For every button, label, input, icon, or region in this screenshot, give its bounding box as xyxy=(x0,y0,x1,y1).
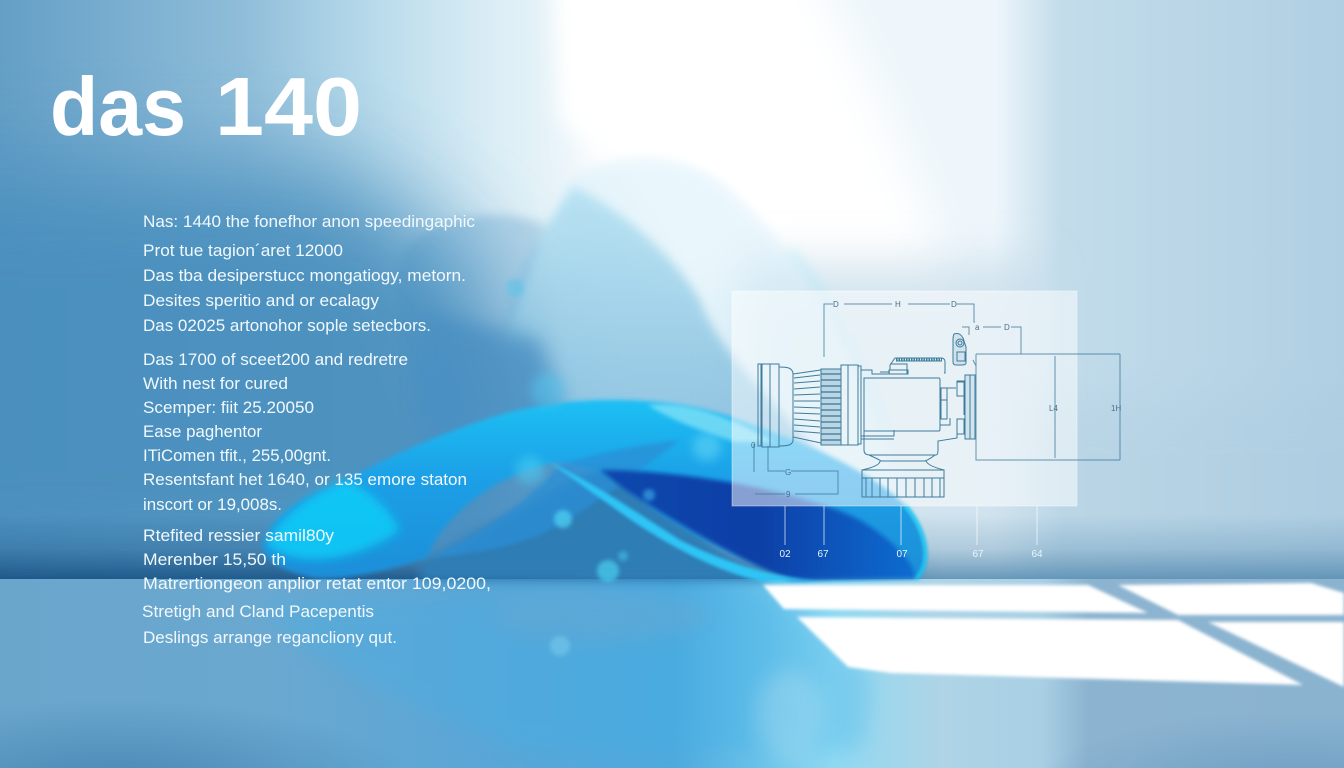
text block: specification list xyxy=(143,350,467,514)
callout leader lines and part numbers: 67 xyxy=(817,549,829,560)
title: das xyxy=(50,60,186,153)
text block: intro paragraph xyxy=(143,212,475,335)
background: flowing blue waves xyxy=(263,158,926,656)
drawing: camera lens assembly xyxy=(758,364,861,447)
labels: dimension letters: H xyxy=(895,300,901,309)
callout leader lines and part numbers: 64 xyxy=(1031,549,1043,560)
callout leader lines and part numbers: 02 xyxy=(779,549,791,560)
text block: specification list: Das 1700 of sceet200 and redretre xyxy=(143,350,408,369)
text block: intro paragraph: Das tba desiperstucc mongatiogy, metorn. xyxy=(143,266,466,285)
text block: specification list: With nest for cured xyxy=(143,374,288,393)
background: window light on floor xyxy=(763,583,1344,687)
labels: dimension letters: a xyxy=(975,323,980,332)
labels: dimension letters: 0 xyxy=(751,441,756,450)
title: 140 xyxy=(215,60,362,153)
drawing: camera body xyxy=(861,358,975,455)
text block: specification list: Ease paghentor xyxy=(143,422,262,441)
labels: dimension letters xyxy=(751,300,1121,499)
labels: dimension letters: 1H xyxy=(1111,404,1121,413)
text block: closing paragraph: Rtefited ressier samil80y xyxy=(143,526,335,545)
text block: closing paragraph: Stretigh and Cland Pacepentis xyxy=(142,602,374,621)
labels: dimension letters: D xyxy=(1004,323,1010,332)
text block: intro paragraph: Desites speritio and or ecalagy xyxy=(143,291,379,310)
labels: dimension letters: D xyxy=(951,300,957,309)
labels: dimension letters: L4 xyxy=(1049,404,1058,413)
drawing: viewfinder knob xyxy=(953,334,966,365)
text block: intro paragraph: Prot tue tagion´aret 12000 xyxy=(143,241,343,260)
text block: intro paragraph: Das 02025 artonohor sople setecbors. xyxy=(143,316,431,335)
text block: specification list: inscort or 19,008s. xyxy=(143,495,282,514)
text block: closing paragraph: Merenber 15,50 th xyxy=(143,550,286,569)
text block: specification list: Resentsfant het 1640, or 135 emore staton xyxy=(143,470,467,489)
panel: technical drawing xyxy=(732,291,1121,506)
text block: specification list: ITiComen tfit., 255,00gnt. xyxy=(143,446,331,465)
text block: specification list: Scemper: fiit 25.20050 xyxy=(143,398,314,417)
title xyxy=(50,60,362,153)
text block: closing paragraph: Deslings arrange regancliony qut. xyxy=(143,628,397,647)
callout leader lines and part numbers xyxy=(779,506,1043,560)
labels: dimension letters: D xyxy=(833,300,839,309)
text block: closing paragraph: Matrertiongeon anplior retat entor 109,0200, xyxy=(143,574,491,593)
text block: closing paragraph xyxy=(142,526,491,647)
labels: dimension letters: G xyxy=(785,468,791,477)
labels: dimension letters: 9 xyxy=(786,490,791,499)
text block: intro paragraph: Nas: 1440 the fonefhor anon speedingaphic xyxy=(143,212,475,231)
drawing: dimension lines xyxy=(754,304,1120,494)
drawing: tripod base xyxy=(862,455,944,497)
callout leader lines and part numbers: 07 xyxy=(896,549,908,560)
callout leader lines and part numbers: 67 xyxy=(972,549,984,560)
